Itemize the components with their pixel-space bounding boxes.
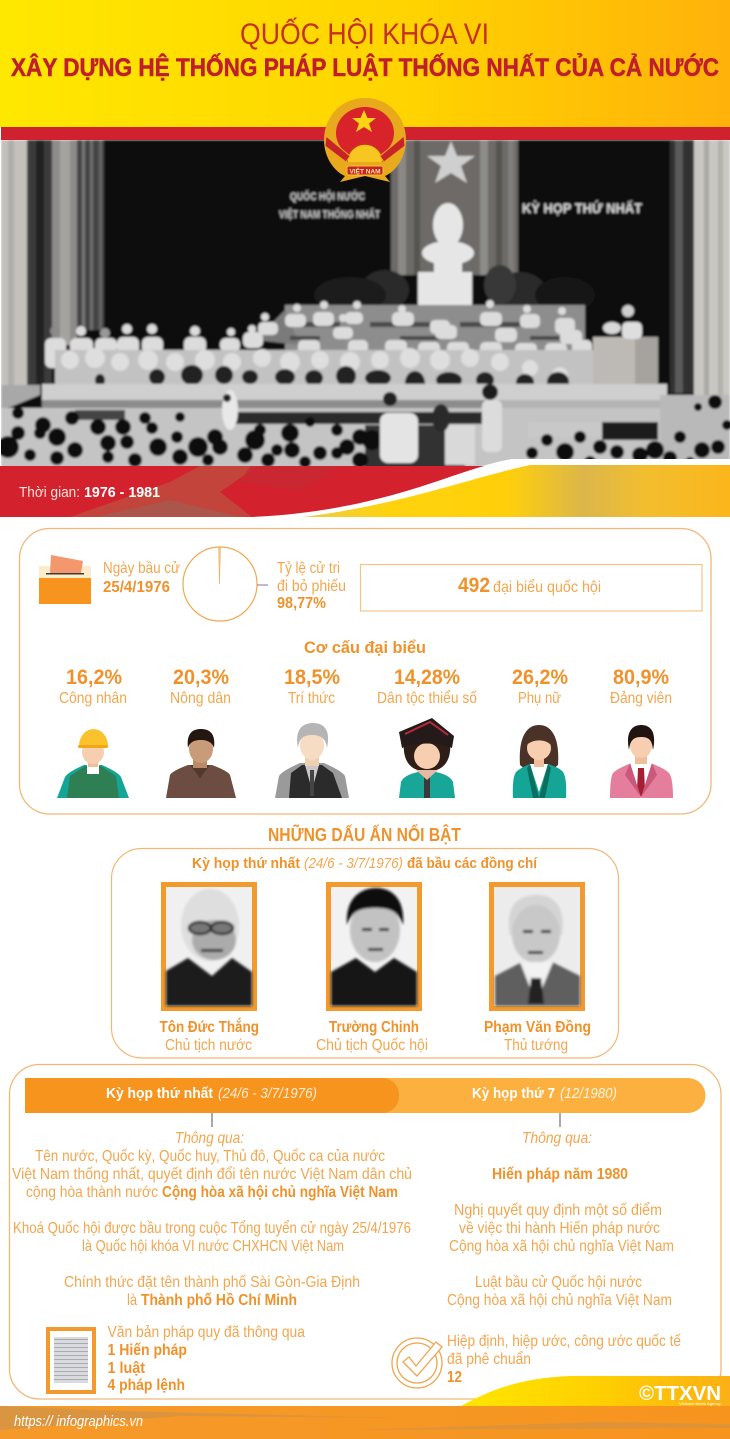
logo: Vietnam News Agency [679, 1401, 721, 1406]
stat: women: 26,2% [512, 666, 568, 689]
standing figures [222, 384, 502, 465]
text block: seventh session decisions: Nghị quyết quy định một số điểm [454, 1201, 662, 1219]
stat: ethnic minorities: Dân tộc thiểu số [377, 689, 477, 707]
stat: farmers [170, 666, 231, 707]
text block: first session decisions: Thành phố Hồ Chí Minh [141, 1292, 297, 1309]
footer band [0, 1406, 730, 1439]
text block: treaties ratified [447, 1333, 681, 1386]
pie chart: turnout 98,77% [183, 547, 268, 621]
stage ledge [1, 384, 730, 470]
text block: first session decisions: Khoá Quốc hội được bầu trong cuộc Tổng tuyển cử ngày 25/4/1976 [13, 1219, 411, 1237]
leader names [160, 1017, 591, 1054]
icon: woman [513, 725, 566, 798]
icon: party member [610, 725, 673, 798]
footer shading [0, 1406, 730, 1430]
logo: ©TTXVN [639, 1383, 721, 1405]
leader names: Trường Chinh [329, 1019, 419, 1036]
podium and speaker [593, 305, 658, 398]
icon: worker [57, 729, 129, 798]
crowd [0, 395, 730, 468]
session subheading: (24/6 - 3/7/1976) [304, 855, 403, 872]
time label [19, 484, 160, 501]
tab titles: (12/1980) [560, 1085, 617, 1102]
text block: seventh session decisions: Hiến pháp năm 1980 [492, 1166, 628, 1183]
icon: ballot box [39, 555, 91, 604]
stat: ethnic minorities: 14,28% [394, 666, 460, 689]
text block: seventh session decisions [447, 1130, 674, 1309]
text block: seventh session decisions: Cộng hòa xã hội chủ nghĩa Việt Nam [447, 1292, 672, 1309]
heading: highlights: NHỮNG DẤU ẤN NỔI BẬT [268, 824, 461, 845]
session subheading: Kỳ họp thứ nhất [192, 855, 300, 872]
turnout label [277, 560, 346, 612]
band shading [70, 466, 340, 517]
stat: workers: Công nhân [59, 690, 127, 707]
national emblem: VIỆT NAM [349, 166, 381, 176]
text block: legal documents passed: 1 Hiến pháp [108, 1342, 187, 1359]
stat: workers: 16,2% [66, 666, 122, 689]
tab titles: Kỳ họp thứ 7 [472, 1085, 555, 1102]
text block: legal documents passed [108, 1324, 305, 1394]
text block: seventh session decisions: Thông qua: [522, 1130, 592, 1147]
text block: first session decisions: Cộng hòa xã hội chủ nghĩa Việt Nam [162, 1184, 398, 1201]
leader names: Tôn Đức Thắng [160, 1017, 259, 1036]
portrait: Phạm Văn Đồng [489, 882, 585, 1011]
plants behind tiers [314, 264, 595, 306]
session subheading [192, 855, 538, 872]
panel: election facts and delegate structure [20, 528, 711, 814]
text block: treaties ratified: Hiệp định, hiệp ước, công ước quốc tế [447, 1333, 681, 1350]
national emblem [324, 98, 406, 182]
text block: first session decisions [12, 1130, 412, 1309]
leader names: Chủ tịch Quốc hội [316, 1037, 428, 1054]
bust on plinth [418, 203, 474, 312]
red ribbon [1, 127, 730, 140]
delegates count box [360, 564, 702, 611]
delegates [45, 300, 592, 368]
stat: intellectuals: 18,5% [284, 666, 340, 689]
icon: legal document [48, 1329, 94, 1392]
text block: seventh session decisions: Luật bầu cử Quốc hội nước [475, 1274, 642, 1291]
stat: women: Phụ nữ [518, 690, 561, 707]
icon: check mark [392, 1338, 442, 1388]
text block: treaties ratified: 12 [447, 1369, 462, 1386]
text block: legal documents passed: Văn bản pháp quy đã thông qua [108, 1324, 305, 1341]
delegates count box: 492 [458, 574, 490, 597]
bottom wave: red band [0, 466, 484, 517]
election date: 25/4/1976 [103, 579, 170, 596]
text block: legal documents passed: 1 luật [108, 1360, 146, 1377]
tab: seventh session [380, 1078, 706, 1113]
panel: elected leaders [112, 848, 618, 1058]
delegates count box: đại biểu quốc hội [493, 578, 601, 596]
icon: intellectual [275, 723, 349, 798]
text block: first session decisions: Thông qua: [175, 1130, 244, 1147]
stage signs: VIỆT NAM THỐNG NHẤT [279, 207, 380, 221]
stat: party members: Đảng viên [610, 690, 672, 707]
title [11, 17, 719, 82]
stat: party members [610, 666, 672, 707]
panel: sessions [10, 1064, 721, 1399]
left curtains [1, 140, 104, 385]
title: QUỐC HỘI KHÓA VI [240, 17, 489, 51]
tab: first session [25, 1078, 399, 1113]
leader names: Chủ tịch nước [165, 1037, 252, 1054]
text block: first session decisions: Chính thức đặt tên thành phố Sài Gòn-Gia Định [64, 1274, 360, 1291]
stat: women [512, 666, 568, 707]
stat: farmers: Nông dân [170, 690, 231, 707]
bottom wave: gold band [303, 465, 730, 517]
text block: first session decisions: cộng hòa thành nước [26, 1184, 158, 1201]
election date: Ngày bầu cử [103, 560, 180, 577]
turnout label: 98,77% [277, 595, 326, 612]
stat: party members: 80,9% [613, 666, 669, 689]
icon: farmer [166, 729, 236, 798]
photo: national assembly session [0, 140, 730, 470]
stage signs: KỲ HỌP THỨ NHẤT [522, 199, 642, 216]
tab titles: Kỳ họp thứ nhất [106, 1085, 213, 1102]
stage signs [279, 189, 642, 221]
website: https:// infographics.vn [14, 1413, 143, 1430]
tab titles [106, 1085, 617, 1102]
text block: treaties ratified: đã phê chuẩn [447, 1350, 531, 1368]
bottom wave: white stripe [250, 459, 730, 517]
leader names: Phạm Văn Đồng [484, 1019, 591, 1036]
heading: delegate structure: Cơ cấu đại biểu [304, 638, 426, 657]
election date [103, 560, 180, 596]
text block: first session decisions: là Quốc hội khóa VI nước CHXHCN Việt Nam [82, 1238, 344, 1255]
stat: intellectuals: Trí thức [288, 690, 335, 707]
portrait: Tôn Đức Thắng [161, 882, 257, 1011]
header background [0, 0, 730, 127]
tiers [285, 305, 585, 355]
icon: ethnic minority woman [399, 718, 455, 798]
stage signs: QUỐC HỘI NƯỚC [290, 189, 365, 203]
footer corner [461, 1376, 730, 1406]
text block: first session decisions: là [127, 1292, 137, 1309]
session subheading: đã bầu các đồng chí [407, 855, 538, 872]
right curtains [670, 140, 730, 395]
turnout label: Tỷ lệ cử tri [277, 560, 340, 577]
portrait: Trường Chinh [326, 882, 422, 1011]
text block: seventh session decisions: về việc thi hành Hiến pháp nước [459, 1220, 660, 1237]
flower banks [52, 346, 594, 386]
stat: intellectuals [284, 666, 340, 707]
text block: legal documents passed: 4 pháp lệnh [108, 1377, 185, 1394]
text block: seventh session decisions: Cộng hòa xã hội chủ nghĩa Việt Nam [449, 1238, 674, 1255]
time label: 1976 - 1981 [84, 484, 160, 501]
time label: Thời gian: [19, 484, 80, 501]
text block: first session decisions: Việt Nam thống nhất, quyết định đổi tên nước Việt Nam dân chủ [12, 1165, 412, 1183]
stat: workers [59, 666, 127, 707]
centre curtain and star [391, 140, 518, 275]
leader names: Thủ tướng [504, 1037, 568, 1054]
stat: farmers: 20,3% [173, 666, 229, 689]
tab titles: (24/6 - 3/7/1976) [218, 1085, 317, 1102]
turnout label: đi bỏ phiếu [277, 578, 346, 595]
stat: ethnic minorities [377, 666, 477, 707]
text block: first session decisions: Tên nước, Quốc kỳ, Quốc huy, Thủ đô, Quốc ca của nước [35, 1148, 385, 1165]
